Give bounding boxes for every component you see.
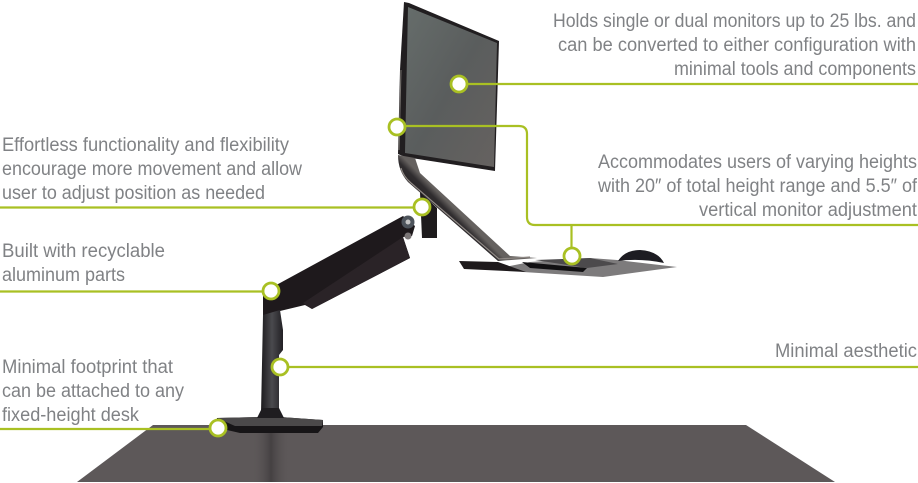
callout: functionality: encourage more movement and allow	[2, 159, 302, 180]
callout: recyclable aluminum: aluminum parts	[2, 265, 125, 286]
monitor	[398, 2, 499, 171]
callout: minimal footprint	[0, 357, 226, 436]
callout: functionality: Effortless functionality and flexibility	[2, 135, 289, 156]
desk surface	[77, 425, 835, 482]
callout: minimal footprint: fixed-height desk	[2, 405, 139, 426]
callout: minimal footprint: Minimal footprint that	[2, 357, 174, 378]
mouse	[618, 250, 664, 263]
callout: height range	[389, 119, 918, 264]
callout: functionality	[0, 135, 430, 215]
monitor arm product	[216, 2, 677, 433]
keyboard tray	[459, 258, 677, 277]
callout: recyclable aluminum	[0, 241, 279, 299]
callout: minimal aesthetic	[272, 341, 918, 375]
pole	[261, 310, 283, 413]
callout: top right monitors	[451, 11, 918, 92]
callout: minimal footprint: can be attached to any	[2, 381, 184, 402]
base	[216, 408, 323, 433]
callout: minimal aesthetic: Minimal aesthetic	[775, 341, 917, 362]
lower arm	[263, 216, 415, 316]
upper support arm	[398, 155, 537, 261]
callout: recyclable aluminum: Built with recyclable	[2, 241, 165, 262]
callout: functionality: user to adjust position as needed	[2, 183, 265, 204]
